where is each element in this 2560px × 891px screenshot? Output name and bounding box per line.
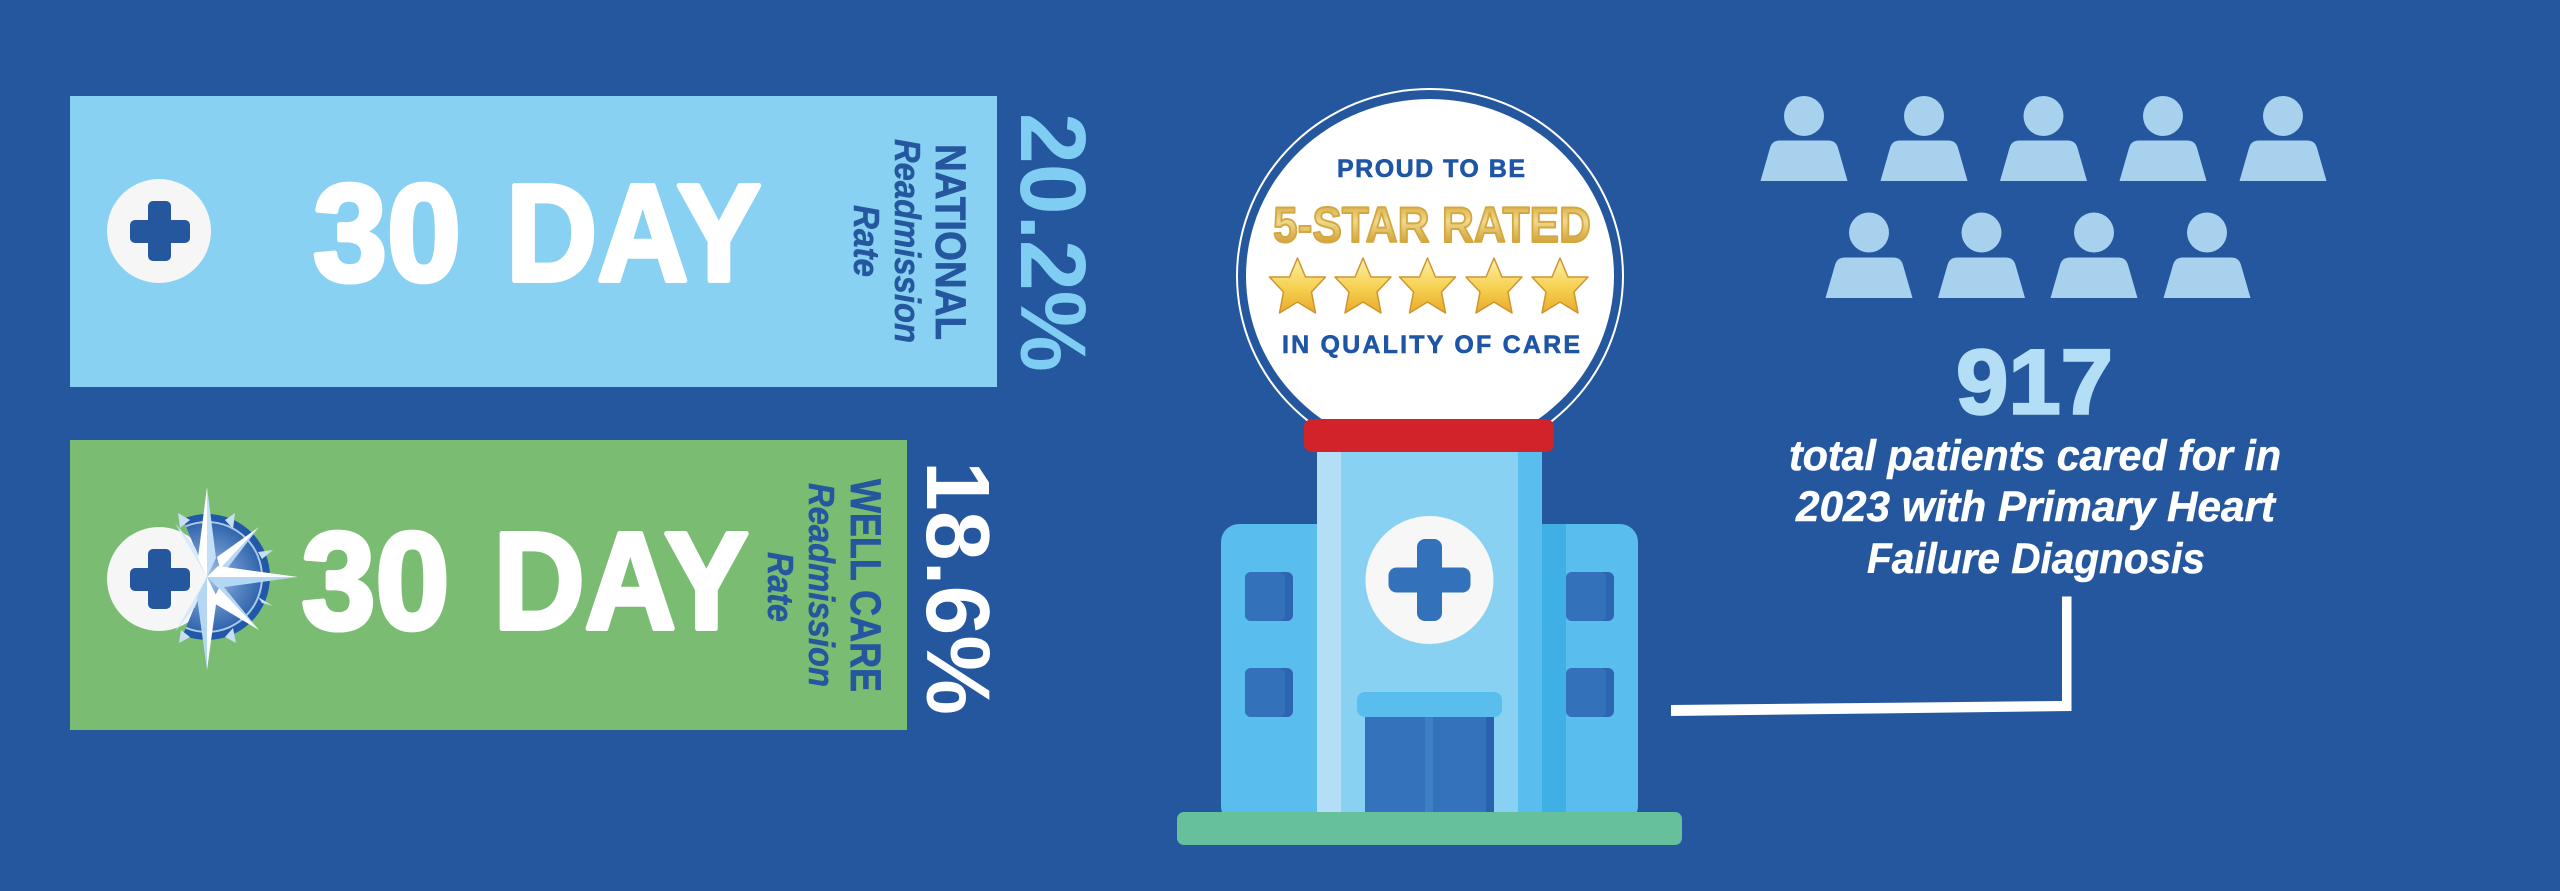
panel: national 30 day readmission (70, 96, 997, 387)
text: in quality of care: IN QUALITY OF CARE (1282, 331, 1580, 359)
label: well care readmission rate: Rate (760, 552, 801, 622)
heading: 30 day: DAY (494, 504, 748, 658)
text: patient description: 2023 with Primary Heart (1795, 483, 2277, 531)
heading: 30 day: 30 (313, 156, 461, 310)
label: national readmission rate: Rate (846, 205, 887, 277)
value: well care rate: 18.6% (907, 461, 1007, 715)
text: proud to be: PROUD TO BE (1337, 155, 1525, 183)
label: national readmission rate: NATIONAL (926, 144, 974, 340)
icons: patient group (1760, 96, 2326, 298)
connector line (1671, 596, 2072, 716)
text: patient description (1789, 432, 2281, 583)
label: national readmission rate: Readmission (887, 139, 928, 343)
ground base (1177, 812, 1682, 845)
roof band (1304, 419, 1554, 452)
text: patient description: Failure Diagnosis (1867, 535, 2205, 583)
heading: 30 day (302, 504, 748, 658)
icon: compass rose (175, 488, 298, 670)
panel: well care 30 day readmission (70, 440, 907, 730)
heading: 30 day: 30 (302, 504, 450, 658)
text: patient description: total patients cared for in (1789, 432, 2281, 480)
entrance canopy (1357, 692, 1502, 717)
icon: medical cross (107, 527, 211, 631)
label: well care readmission rate: Readmission (801, 483, 842, 687)
value: national rate: 20.2% (1001, 113, 1105, 372)
text: 5-star rated: 5-STAR RATED (1273, 197, 1591, 253)
stat: 917: 917 (1956, 332, 2113, 434)
label: national readmission rate (846, 139, 974, 343)
entrance door (1365, 710, 1494, 812)
label: well care readmission rate: WELL CARE (841, 479, 889, 692)
heading: 30 day: DAY (506, 156, 761, 310)
windows (1245, 572, 1614, 717)
badge: 5-star rated (1236, 88, 1624, 422)
central tower (1317, 440, 1542, 812)
icon: hospital building (1177, 419, 1682, 845)
side wings (1221, 524, 1638, 824)
label: well care readmission rate (760, 479, 889, 692)
icon: medical cross (107, 179, 211, 283)
heading: 30 day (313, 156, 761, 310)
tower medical cross (1366, 516, 1494, 644)
icon: five gold stars (1270, 258, 1588, 313)
infographic canvas (70, 88, 2326, 845)
